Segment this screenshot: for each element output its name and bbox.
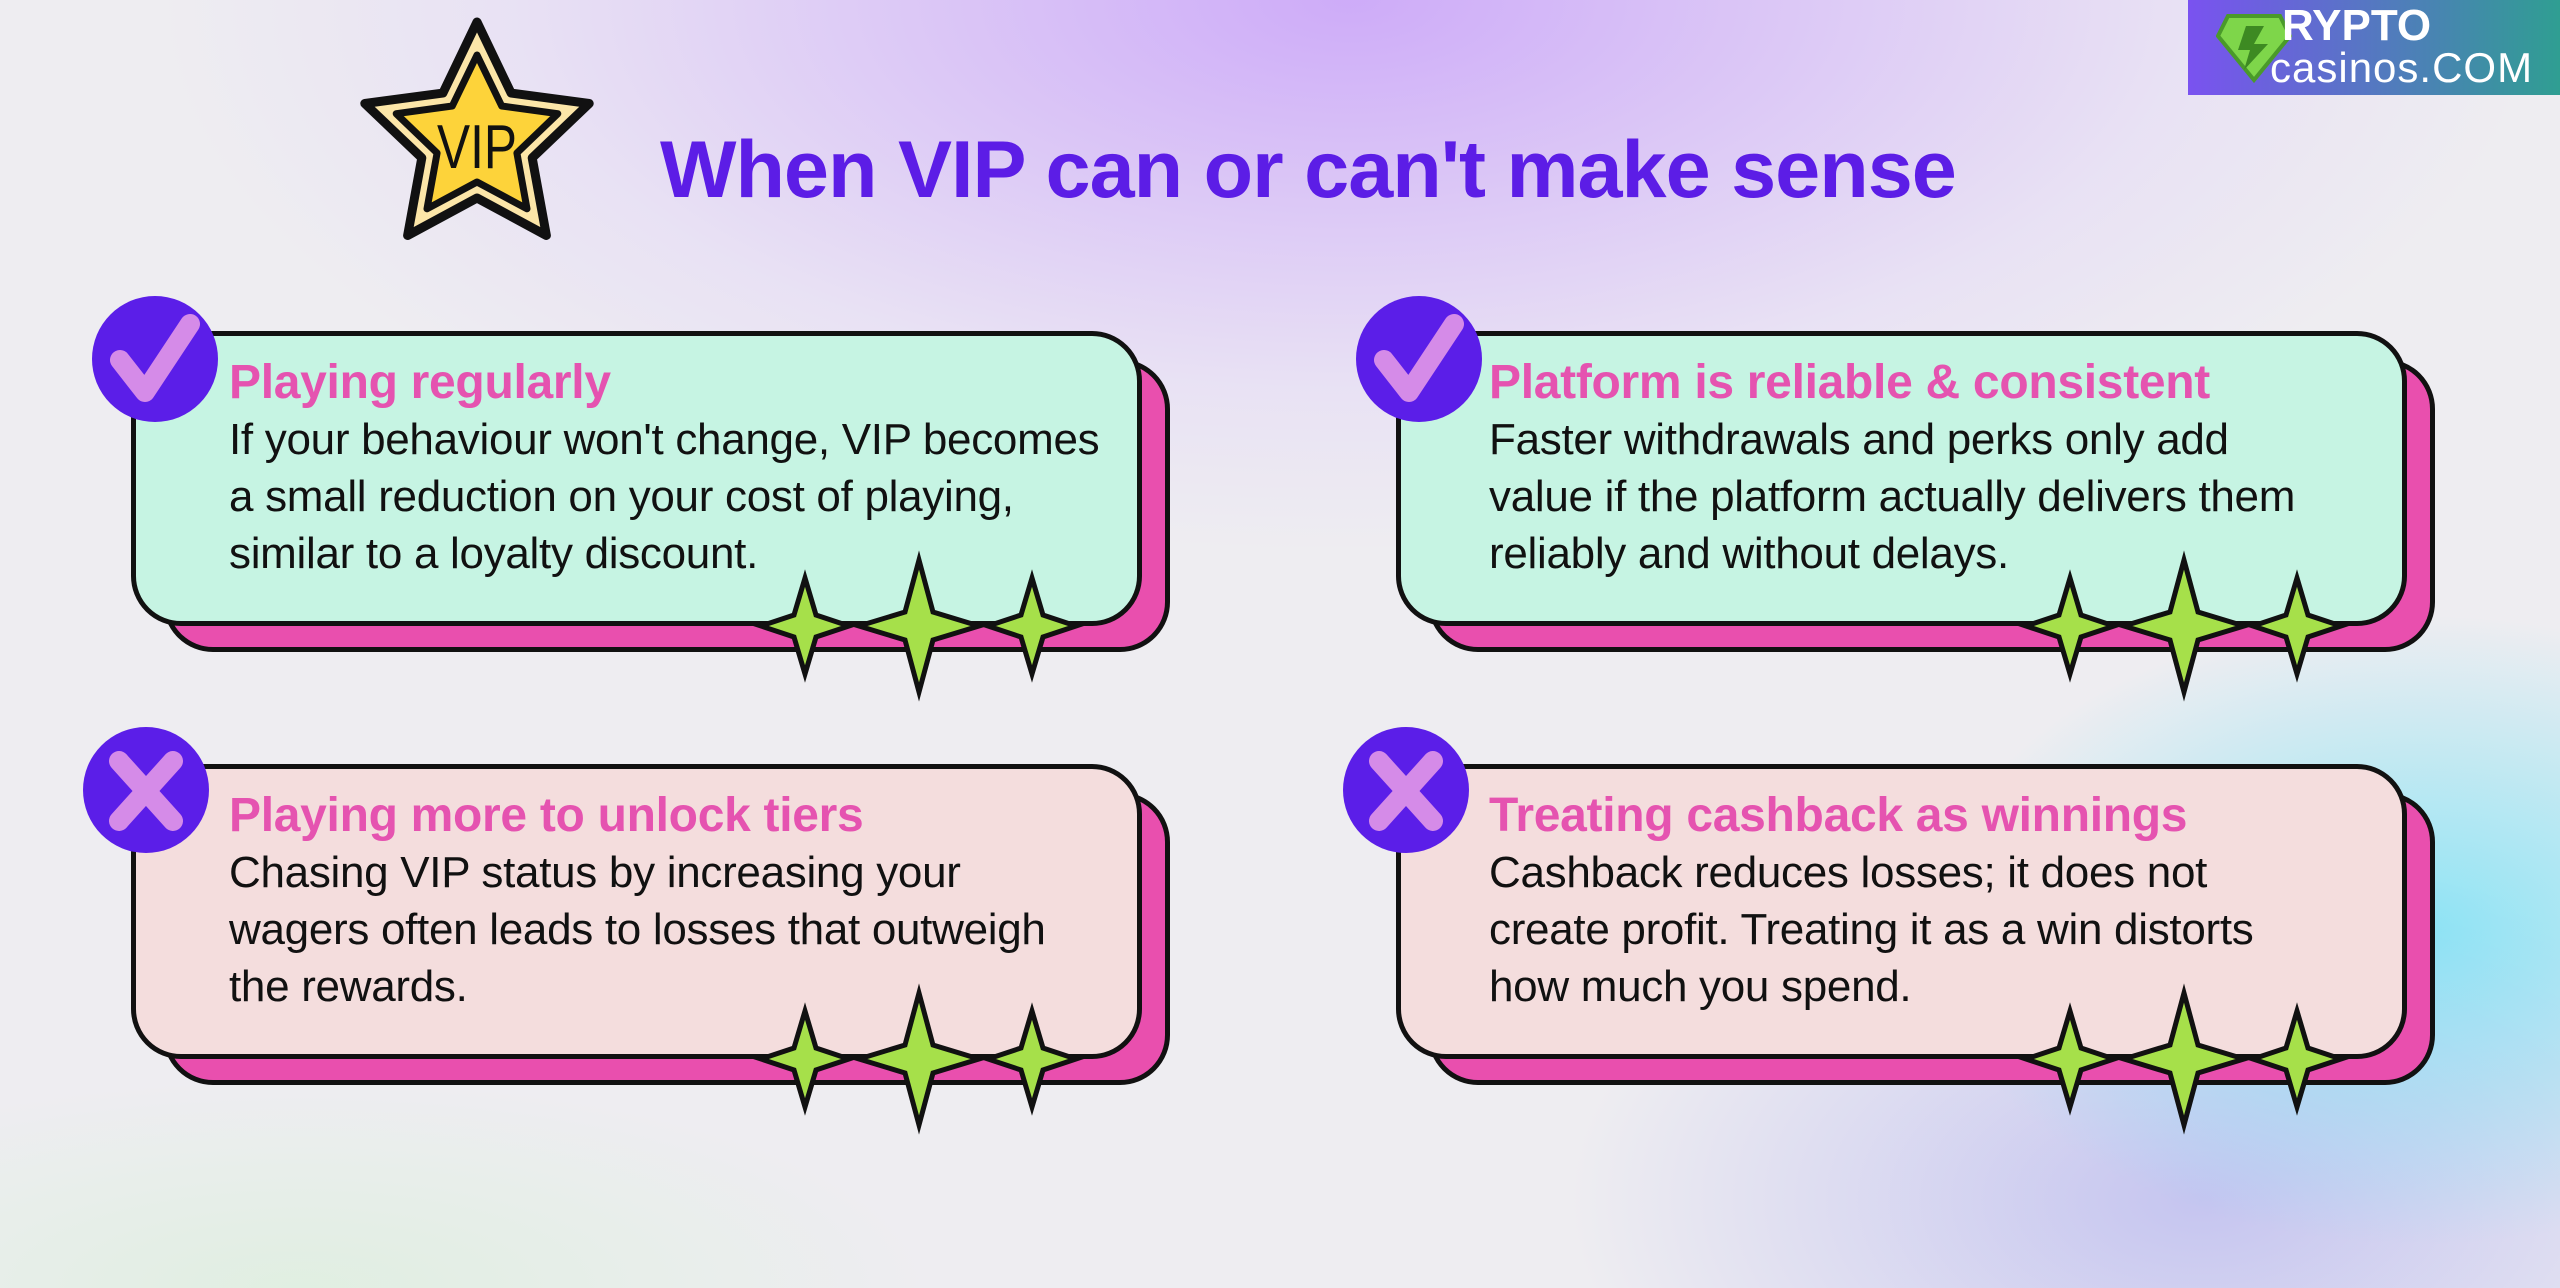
text — [1489, 415, 2295, 578]
text: the rewards. — [229, 962, 468, 1011]
icon: gem — [2216, 14, 2292, 83]
icon: sparkles — [2018, 550, 2349, 702]
logo: casinos.COM — [2270, 44, 2533, 91]
heading: Platform is reliable & consistent — [1489, 356, 2210, 409]
text: Cashback reduces losses; it does not — [1489, 848, 2207, 897]
icon: VIP star — [360, 18, 594, 240]
text: similar to a loyalty discount. — [229, 529, 758, 578]
icon: cross — [1343, 727, 1469, 853]
heading: Playing more to unlock tiers — [229, 789, 863, 842]
text — [1489, 848, 2253, 1011]
icon: sparkles — [2018, 984, 2349, 1134]
text — [229, 415, 1099, 578]
icon: VIP star: VIP — [437, 112, 517, 181]
panel: playing regularly — [92, 296, 1170, 702]
text: value if the platform actually delivers them — [1489, 472, 2295, 521]
panel: playing more — [83, 727, 1170, 1134]
icon: sparkles — [753, 984, 1084, 1134]
heading: Playing regularly — [229, 356, 611, 409]
panel: platform reliable — [1356, 296, 2435, 702]
logo — [2188, 0, 2560, 95]
text: Chasing VIP status by increasing your — [229, 848, 961, 897]
text: how much you spend. — [1489, 962, 1911, 1011]
heading: Treating cashback as winnings — [1489, 789, 2187, 842]
icon: check — [1356, 296, 1482, 422]
text: a small reduction on your cost of playing, — [229, 472, 1014, 521]
icon: sparkles — [753, 550, 1084, 702]
logo text: RYPTO — [2282, 1, 2431, 50]
text: If your behaviour won't change, VIP becomes — [229, 415, 1099, 464]
panel: cashback — [1343, 727, 2435, 1134]
text: create profit. Treating it as a win distorts — [1489, 905, 2253, 954]
text — [229, 848, 1046, 1011]
icon: cross — [83, 727, 209, 853]
title: When VIP can or can't make sense — [660, 125, 1956, 215]
icon: check — [92, 296, 218, 422]
text: Faster withdrawals and perks only add — [1489, 415, 2229, 464]
text: reliably and without delays. — [1489, 529, 2009, 578]
text: wagers often leads to losses that outweigh — [229, 905, 1046, 954]
